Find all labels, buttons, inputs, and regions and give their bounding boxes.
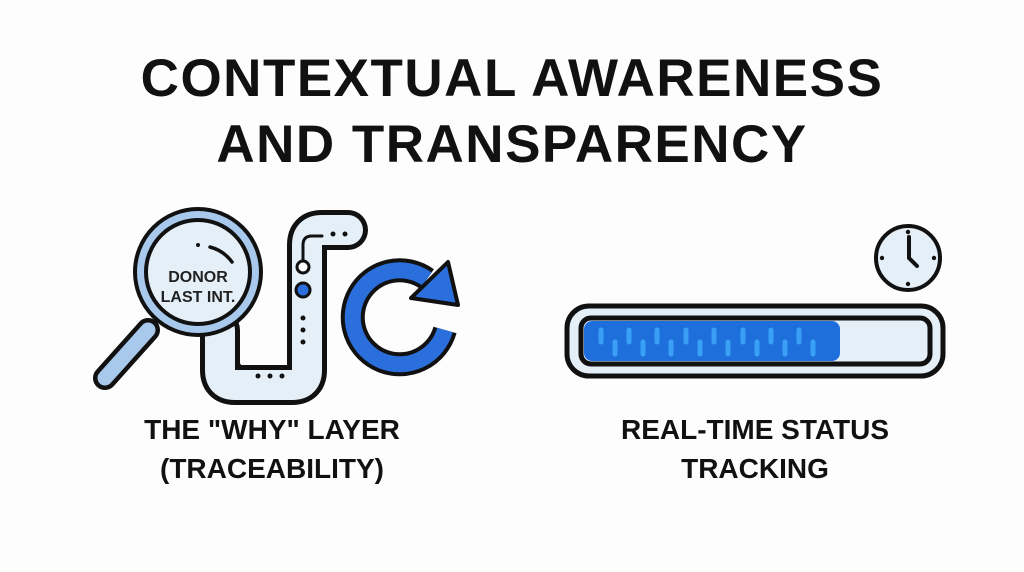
progress bar — [567, 306, 943, 376]
label: why layer: (TRACEABILITY) — [160, 453, 384, 484]
label: real-time status — [621, 414, 889, 484]
icon: pipe path — [220, 230, 348, 385]
title: CONTEXTUAL AWARENESS — [141, 49, 883, 108]
title: AND TRANSPARENCY — [216, 115, 808, 174]
icon: magnifier — [105, 209, 261, 378]
label: why layer — [144, 414, 400, 484]
label: why layer: THE "WHY" LAYER — [144, 414, 400, 445]
icon: clock — [876, 226, 940, 290]
title — [141, 49, 883, 174]
label: real-time status: TRACKING — [681, 453, 829, 484]
icon: refresh arrow — [353, 262, 458, 364]
icon: magnifier: DONOR — [168, 269, 228, 286]
label: real-time status: REAL-TIME STATUS — [621, 414, 889, 445]
icon: magnifier: LAST INT. — [161, 289, 235, 306]
